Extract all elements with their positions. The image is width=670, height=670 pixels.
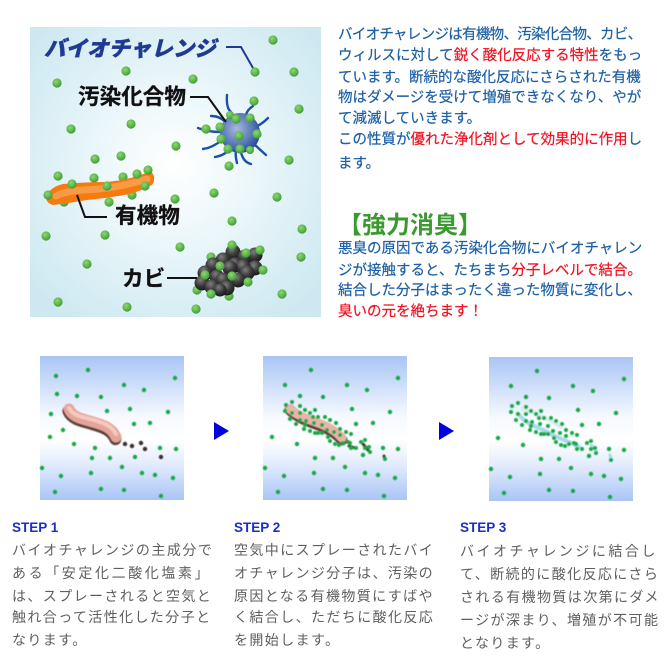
text block: description [338,26,642,172]
step 2 text: を開始します。 [234,632,340,648]
step 2 text: 空気中にスプレーされたバイ [234,542,434,558]
dots: dark particles [123,441,163,459]
text block: deodorization [338,240,642,320]
text block: description: て減滅していきます。 [338,110,481,127]
arrow: step 1 to 2 [214,422,229,440]
text block: description: 物はダメージを受けて増殖できなくなり、やが [338,89,642,106]
step 1 text: ある「安定化二酸化塩素」 [12,565,211,581]
step 2 text: オチャレンジ分子は、汚染の [234,565,434,581]
label: pollutant compound [78,84,226,122]
text block: deodorization: 臭いの元を絶ちます！ [338,303,483,320]
step 3 text: となります。 [460,635,551,651]
label: organic matter [77,195,180,228]
panel: step 2 image [263,356,407,500]
step 1 text: STEP 1 [12,520,59,535]
panel: step 3 image [489,357,633,501]
remnant: decomposed matter [519,409,611,459]
step 3 text [460,520,660,651]
step 2 text: STEP 2 [234,520,280,535]
label: biochallenge: バイオチャレンジ [44,37,219,61]
step 3 text: STEP 3 [460,520,507,535]
label: pollutant compound: 汚染化合物 [78,84,186,109]
label: mold: カビ [122,266,165,291]
text block: description: ています。断続的な酸化反応にさらされた有機 [338,69,641,86]
text block: deodorization: 結合した分子はまったく違った物質に変化し、 [338,281,642,299]
panel: molecule diagram [30,27,321,317]
label: biochallenge [44,37,253,68]
text block: description: この性質が優れた浄化剤として効果的に作用し [338,130,642,148]
icon: orange organic matter [43,165,154,205]
worm: with molecules attached [290,409,385,459]
step 1 text: 触れ合って活性化した分子と [12,609,212,625]
step 3 text: バイオチャレンジに結合し [460,543,658,559]
step 2 text [234,520,434,648]
step 2 text: 原因となる有機物質にすばや [234,588,434,604]
text block: description: バイオチャレンジは有機物、汚染化合物、カビ、 [338,26,641,43]
step 1 text: は、スプレーされると空気と [12,588,212,604]
icon: pollutant compound sphere [198,95,268,171]
label: organic matter: 有機物 [115,203,180,228]
label: mold [122,266,197,291]
heading: strong deodorization: 【強力消臭】 [338,212,482,239]
floating green molecules [41,35,307,314]
arrow: step 2 to 3 [439,422,454,440]
step 3 text: される有機物質は次第にダメ [460,589,660,605]
text block: deodorization: 悪臭の原因である汚染化合物にバイオチャレン [338,240,642,257]
dots: molecules [40,368,178,498]
text block: description: ウィルスに対して鋭く酸化反応する特性をもっ [338,47,642,64]
step 3 text: ージが深まり、増殖が不可能 [460,612,659,628]
step 2 text: く結合し、ただちに酸化反応 [234,609,434,625]
worm: organic matter [68,408,116,439]
step 1 text [12,520,213,648]
panel: step 1 image [40,356,184,500]
step 1 text: なります。 [12,632,88,648]
step 3 text: て、断続的に酸化反応にさら [460,566,659,582]
text block: deodorization: ジが接触すると、たちまち分子レベルで結合。 [338,262,642,279]
step 1 text: バイオチャレンジの主成分で [12,542,213,558]
icon: mold cluster [192,240,268,301]
text block: description: ます。 [338,155,380,172]
